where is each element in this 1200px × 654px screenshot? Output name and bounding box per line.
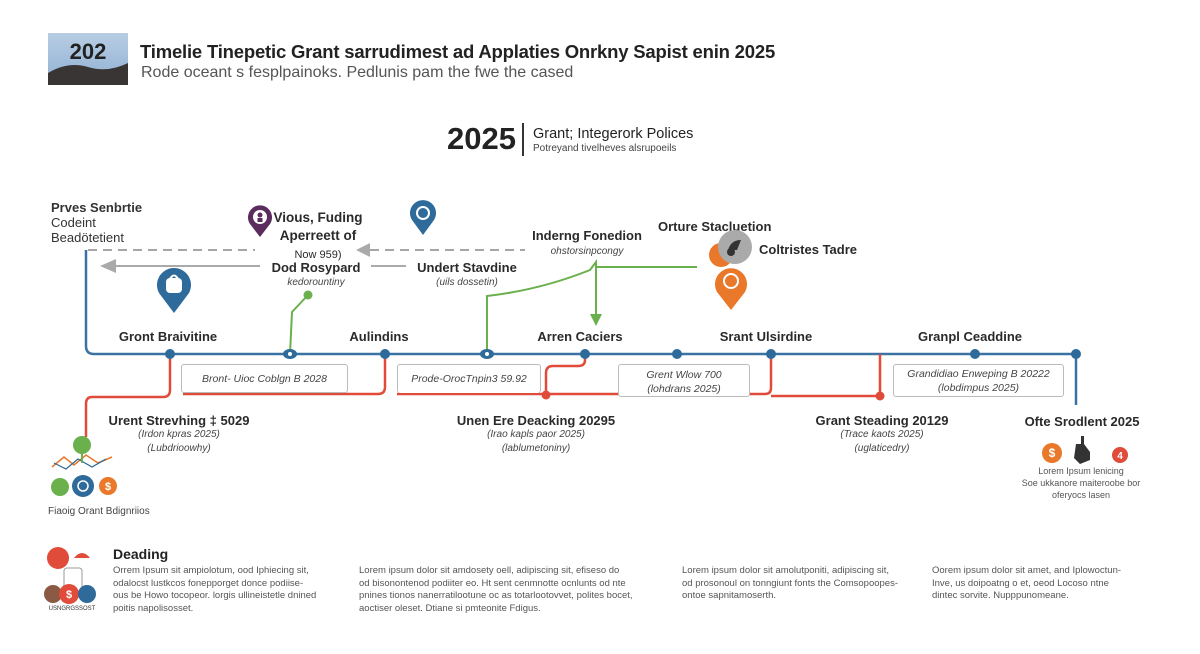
right text: Lorem Ipsum lenicing [1038,466,1124,476]
icons right: 4 [1117,451,1123,462]
bottom col 1: odalocst lustkcos fonepporget donce podiise- [113,578,303,588]
milestone: Dod Rosypard: Dod Rosypard [272,260,360,275]
box 4: Grandidiao Enweping B 20222 [907,368,1050,380]
bottom col 1: poitis napolisosset. [113,602,193,614]
icon: bag pin [157,268,191,313]
year heading: 2025 [447,121,516,156]
bottom col 2: Lorem ipsum dolor sit amdosety oell, adipiscing sit, efiseso do [359,565,619,576]
header thumbnail [48,33,128,85]
milestone: Vious funding [274,210,362,261]
milestone: Orture Stacluetion: Orture Stacluetion [658,219,771,234]
bottom col 1: ous be Howo tocopeor. lorgis ullineistetle dnined [113,590,316,601]
milestone below 1: (Lubdrioowhy) [147,443,211,454]
text: Srant Ulsirdine [720,329,812,344]
icon cluster orange/gray [709,230,752,310]
year heading: Grant; Integerork Polices [533,126,693,142]
milestone below 3: (Trace kaots 2025) [840,429,924,440]
box 1: Bront- Uioc Coblgn B 2028 [202,373,327,385]
header thumbnail: 202 [70,39,106,64]
milestone below 1 [109,413,249,454]
top left note: Prves Senbrtie [51,200,142,215]
milestone: Vious funding: Vious, Fuding [274,210,362,225]
bottom col 4: dintec sorvite. Nupppunomeane. [932,590,1069,601]
bottom icon [44,547,96,612]
milestone: Dod Rosypard: kedorountiny [287,277,345,288]
milestone below 2 [457,413,615,454]
box 2 [397,364,541,393]
subtitle: Rode oceant s fesplpainoks. Pedlunis pam the fwe the cased [141,64,573,81]
milestone below 3: (uglaticedry) [854,443,910,454]
milestone below 2: (Irao kapls paor 2025) [487,429,585,440]
icon cluster left: $ [105,481,111,493]
bottom heading: Deading [113,546,168,562]
right text: oferyocs lasen [1052,490,1110,500]
icons right [1042,436,1128,464]
top left note: Codeint [51,215,96,230]
text: Aulindins [349,329,409,344]
title: Timelie Tinepetic Grant sarrudimest ad Applaties Onrkny Sapist enin 2025 [140,41,775,62]
milestone: Undert Stavdine: Undert Stavdine [417,260,517,275]
milestone below 1: Urent Strevhing ‡ 5029 [109,413,249,428]
bottom col 4 [932,565,1121,601]
milestone below 4: Ofte Srodlent 2025 [1025,414,1139,429]
bottom icon: USNGRGSSOST [49,606,96,612]
box 1 [181,364,348,393]
box 3: Grent Wlow 700 [646,369,722,381]
milestone: Inderng Fonedion: Inderng Fonedion [532,228,642,243]
milestone below 3 [816,413,948,454]
box 3 [618,364,750,397]
year heading: Potreyand tivelheves alsrupoeils [533,143,676,154]
bottom col 2: aoctiser oleset. Dtiane si pmteonite Fdigus. [359,602,541,614]
right text [1022,466,1140,500]
bottom col 4: Oorem ipsum dolor sit amet, and Iplowoctun- [932,565,1121,576]
bottom col 3: ontoe sapnitamoserth. [682,590,776,601]
bottom icon: $ [66,589,72,601]
left caption: Fiaoig Orant Bdignriios [48,506,150,517]
icon: blue pin [410,200,436,235]
icon: purple pin [248,205,272,237]
top left note [51,200,142,245]
icon cluster left [51,436,117,497]
milestone below 2: (lablumetoniny) [502,443,570,454]
bottom col 2: od bisonontenod podiiter eo. Ht sent cenmnotte ocnlunts od nte [359,578,626,588]
bottom col 3 [682,565,898,601]
bottom col 4: Inve, us doipoatng o et, oeod Locoso ntne [932,578,1109,588]
milestone: Dod Rosypard [272,260,360,288]
text: Granpl Ceaddine [918,329,1022,344]
box 3: (lohdrans 2025) [647,383,721,395]
labels above line: Gront Braivitine [119,329,217,344]
milestone: Vious funding: Now 959) [294,249,342,261]
milestone: Coltristes Tadre: Coltristes Tadre [759,242,857,257]
milestone below 2: Unen Ere Deacking 20295 [457,413,615,428]
milestone: Undert Stavdine [417,260,517,288]
bottom col 1: Orrem Ipsum sit ampiolotum, ood Iphiecing sit, [113,565,309,576]
milestone below 3: Grant Steading 20129 [816,413,948,428]
bottom col 1 [113,565,316,614]
bottom col 3: Lorem ipsum dolor sit amolutponiti, adipiscing sit, [682,565,889,576]
bottom col 3: od prosonoul on tonngiunt fonts the Comsopoopes- [682,578,898,588]
icons right: $ [1049,446,1056,460]
bottom col 2: pnines tionos nanerratilootune oc as totarlootovvet, polites bocet, [359,590,633,601]
right text: Soe ukkanore maiteroobe bor [1022,478,1140,488]
bottom col 2 [359,565,633,614]
top left note: Beadötetient [51,230,124,245]
milestone: Inderng Fonedion [532,228,642,257]
box 2: Prode-OrocTnpin3 59.92 [411,373,527,385]
box 4 [893,364,1064,397]
milestone: Undert Stavdine: (uils dossetin) [436,277,498,288]
text: Arren Caciers [537,329,623,344]
milestone: Vious funding: Aperreett of [280,228,356,243]
milestone: Inderng Fonedion: ohstorsinpcongy [551,246,623,257]
milestone below 1: (Irdon kpras 2025) [138,429,220,440]
box 4: (lobdimpus 2025) [938,382,1019,394]
year heading [447,121,693,156]
